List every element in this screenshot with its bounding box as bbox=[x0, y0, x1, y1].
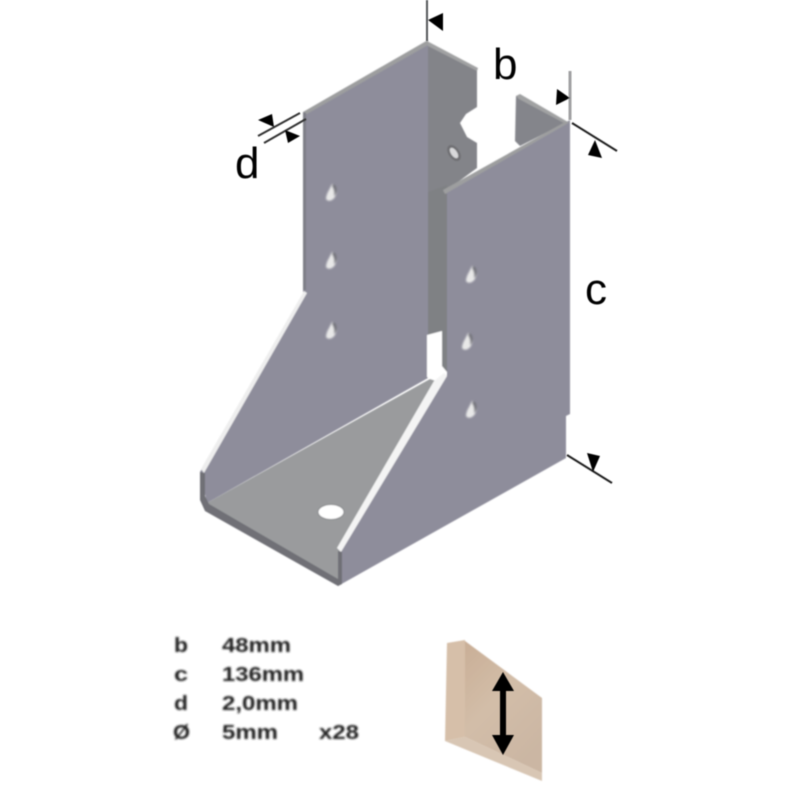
specification table bbox=[173, 635, 359, 744]
dimension letters: b bbox=[493, 40, 517, 89]
specification table: b bbox=[174, 635, 188, 657]
base floor bbox=[207, 379, 436, 580]
right rear tab top edge bbox=[516, 94, 568, 123]
specification table: d bbox=[174, 693, 188, 715]
left plate top edge bbox=[303, 40, 428, 115]
dimension letters: d bbox=[235, 139, 259, 188]
right plate top edge bbox=[443, 122, 570, 194]
specification table: x28 bbox=[319, 722, 359, 744]
back flange with notch bbox=[428, 42, 477, 372]
dimension c lines and arrows bbox=[567, 123, 617, 483]
timber left end bbox=[445, 640, 465, 741]
timber board icon bbox=[445, 640, 542, 781]
right rear tab bbox=[515, 95, 567, 146]
specification table: 136mm bbox=[222, 664, 304, 686]
inner strip shade bbox=[428, 185, 447, 372]
timber bottom edge bbox=[445, 737, 542, 781]
dimension d lines and arrows bbox=[258, 113, 306, 143]
dimension letters bbox=[235, 40, 607, 314]
specification table: 2,0mm bbox=[222, 693, 298, 715]
specification table: 48mm bbox=[222, 635, 291, 657]
left side plate bbox=[200, 43, 428, 503]
joist hanger bracket bbox=[200, 40, 570, 586]
timber face bbox=[465, 641, 542, 773]
specification table: c bbox=[174, 664, 188, 686]
right front vertical edge shade bbox=[338, 551, 342, 586]
specification table: 5mm bbox=[222, 722, 278, 744]
specification table: Ø bbox=[173, 722, 190, 744]
dimension letters: c bbox=[585, 265, 607, 314]
right plate white edge bbox=[337, 373, 447, 552]
double-headed arrow bbox=[492, 672, 514, 755]
back flange top edge bbox=[427, 41, 478, 71]
floor hole bbox=[318, 504, 344, 520]
left plate holes bbox=[326, 184, 337, 339]
left plate outer edge shade bbox=[303, 112, 306, 290]
dimension b lines and arrows bbox=[427, 0, 570, 120]
right plate holes bbox=[462, 266, 477, 418]
floor lip left bbox=[200, 472, 338, 586]
left plate white edge bbox=[201, 291, 307, 473]
back flange hole bbox=[444, 142, 464, 164]
right side plate bbox=[338, 120, 570, 586]
white window gap bbox=[427, 331, 447, 381]
